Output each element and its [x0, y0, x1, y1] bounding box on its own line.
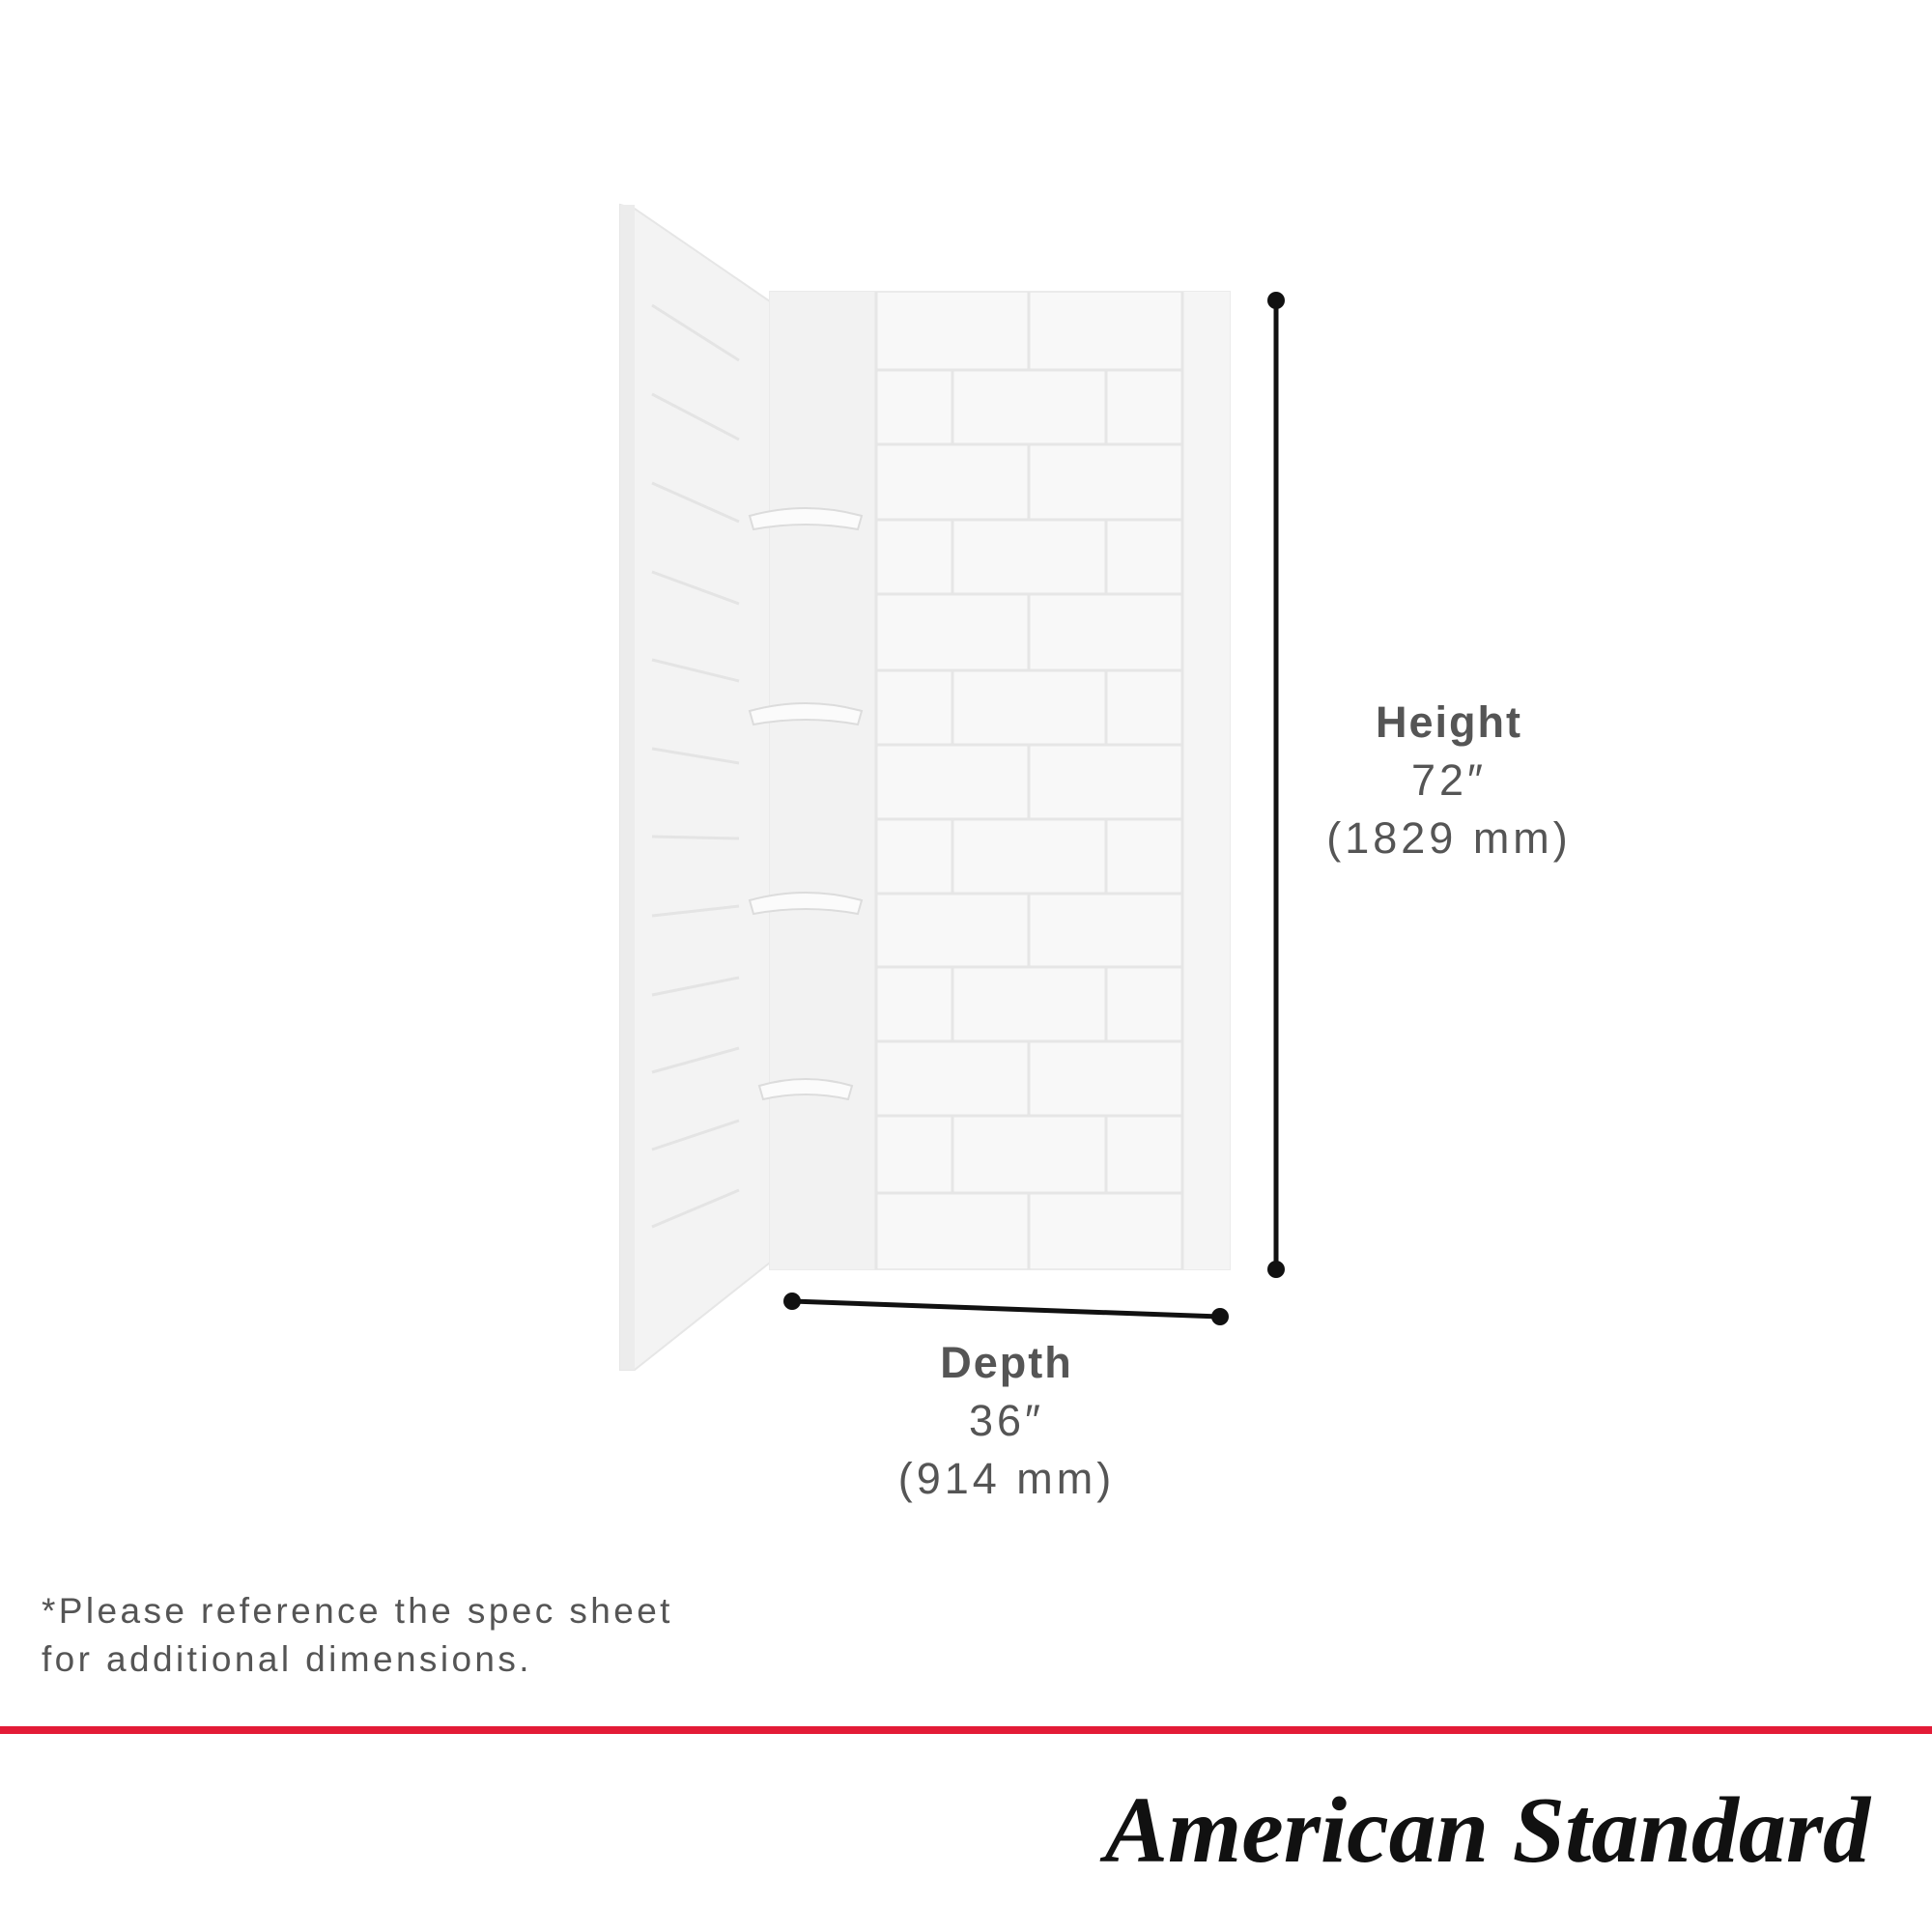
- height label: [1326, 697, 1572, 863]
- footnote: [42, 1591, 673, 1679]
- footnote: for additional dimensions.: [42, 1639, 532, 1679]
- height label: (1829 mm): [1326, 813, 1572, 863]
- height label: 72″: [1411, 755, 1487, 805]
- height label: Height: [1376, 697, 1522, 747]
- depth dimension line: [783, 1293, 1229, 1325]
- depth label: (914 mm): [898, 1454, 1115, 1503]
- height dimension line: [1267, 292, 1285, 1278]
- depth label: [898, 1338, 1115, 1503]
- corner shelves: [750, 508, 862, 1099]
- depth label: 36″: [969, 1396, 1044, 1445]
- red divider line: [0, 1726, 1932, 1734]
- left side panel: [620, 205, 770, 1370]
- back wall panel: [770, 292, 1230, 1269]
- brand logo: American Standard: [1105, 1778, 1870, 1883]
- footnote: *Please reference the spec sheet: [42, 1591, 673, 1631]
- depth label: Depth: [940, 1338, 1073, 1387]
